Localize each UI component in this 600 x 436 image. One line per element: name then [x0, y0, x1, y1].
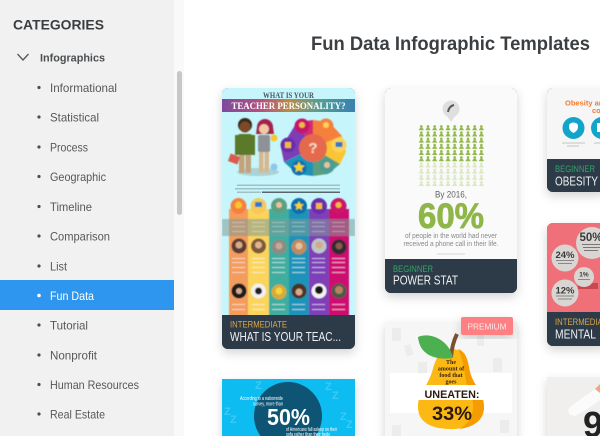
background letter z marks: Z	[224, 406, 231, 418]
category list: Human Resources	[50, 378, 139, 392]
text: survey detail	[286, 427, 337, 436]
icon: chevron	[18, 54, 28, 60]
stat: 50%: 50%	[267, 404, 310, 430]
card footer: WHAT IS YOUR TEAC...	[230, 330, 341, 344]
text: survey intro: According to a nationwide	[240, 396, 283, 402]
background letter z marks: Z	[230, 414, 237, 426]
panel: sidebar	[0, 0, 184, 436]
card footer: INTERMEDIATE	[230, 320, 287, 330]
category list: Tutorial	[50, 318, 88, 332]
illustration: two teachers	[228, 118, 279, 176]
card: nine statistic	[547, 377, 600, 436]
category list	[37, 81, 139, 422]
background letter z marks: Z	[255, 380, 262, 392]
icon: phone pin	[442, 100, 460, 122]
table: teacher columns	[222, 198, 355, 319]
text: pear caption: The	[446, 360, 456, 366]
icons: conditions	[562, 117, 600, 146]
illustration: hand	[568, 388, 600, 416]
card footer	[547, 166, 598, 192]
card footer	[385, 266, 517, 293]
category list: Statistical	[50, 110, 99, 124]
badge: premium	[461, 317, 513, 335]
card footer	[222, 315, 355, 349]
text block: intro	[235, 184, 340, 193]
illustration: pear	[416, 334, 486, 429]
text: stat description	[404, 233, 499, 248]
category list: Informational	[50, 81, 117, 95]
heading: what is your: WHAT IS YOUR	[263, 91, 314, 100]
card: obesity	[547, 88, 600, 192]
background trash icons	[392, 328, 509, 436]
stat bubbles: 12%	[555, 286, 575, 296]
background letter z marks: Z	[340, 411, 347, 423]
card: power stat	[385, 88, 517, 293]
category list: Process	[50, 140, 88, 154]
category list: List	[50, 260, 68, 274]
text: survey intro: survey, more than	[253, 402, 283, 408]
chart: personality wheel: ?	[308, 140, 318, 157]
text: survey detail: of Americans fall asleep on their	[286, 427, 337, 433]
card: food waste pear	[385, 322, 517, 436]
category list: Nonprofit	[50, 348, 98, 362]
stat bubbles: 1%	[579, 272, 589, 278]
card footer	[547, 318, 600, 346]
stat: 33%: 33%	[432, 404, 472, 425]
text: uneaten: UNEATEN:	[424, 389, 480, 401]
category list: Comparison	[50, 230, 110, 244]
category list: Timeline	[50, 200, 92, 214]
background letter z marks: Z	[346, 419, 353, 431]
card footer: POWER STAT	[393, 274, 458, 288]
stat bubbles	[552, 227, 600, 306]
chart: personality wheel	[280, 118, 346, 176]
category list: Real Estate	[50, 408, 105, 422]
stat bubbles: 24%	[555, 250, 575, 261]
category list: Geographic	[50, 170, 106, 184]
text: stat description: received a phone call in their life.	[404, 241, 499, 248]
card: mental health	[547, 223, 600, 346]
stat: 60%: 60%	[418, 197, 484, 236]
background letter z marks: Z	[325, 381, 332, 393]
text: pear caption	[438, 360, 465, 386]
card footer: BEGINNER	[393, 264, 433, 275]
category list: Fun Data	[50, 289, 94, 303]
card: teacher personality	[222, 88, 355, 349]
chart: pictogram of people	[418, 125, 485, 187]
background letter z marks	[224, 380, 353, 431]
heading: categories: CATEGORIES	[13, 16, 104, 32]
text: stat description: of people in the world had never	[405, 233, 498, 240]
text: pear caption: food that	[439, 373, 463, 379]
title: Fun Data Infographic Templates	[311, 33, 590, 55]
badge: premium: PREMIUM	[468, 322, 506, 332]
text: pear caption: amount of	[438, 366, 465, 372]
text: survey intro	[240, 396, 283, 408]
text: by 2016: By 2016,	[435, 190, 467, 200]
banner: teacher personality: TEACHER PERSONALITY?	[232, 102, 346, 112]
white band	[390, 373, 512, 413]
source line	[437, 254, 465, 255]
label: infographics: Infographics	[40, 52, 105, 64]
card: sleep statistic	[222, 379, 355, 436]
background letter z marks: Z	[332, 390, 339, 402]
active row: fun data	[0, 280, 174, 310]
scrollbar	[177, 71, 182, 215]
text: pear caption: goes	[446, 380, 457, 386]
